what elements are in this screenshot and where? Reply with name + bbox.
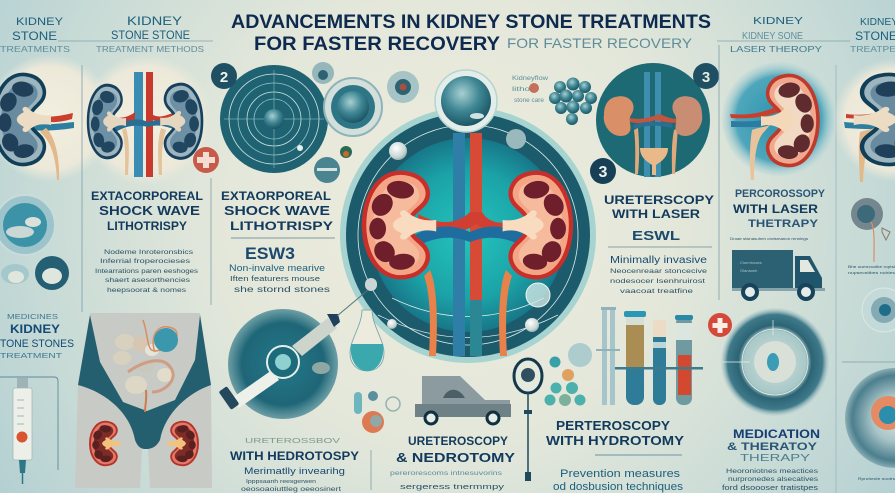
small disc: [862, 288, 895, 332]
text block: extracorporeal left: EXTACORPOREAL: [91, 191, 203, 203]
text block: medication and therapy: Heoroniotnes meactices: [726, 469, 818, 475]
text block: with hedrotospy: URETEROSSBOV: [245, 438, 341, 445]
text block: medication and therapy: ford dsoooser tratistpes: [722, 485, 819, 492]
text block: extracorporeal left: shaert asesorthencies: [105, 277, 191, 284]
magnifying lens: [435, 70, 497, 132]
text block: percoroscopy with laser therapy: PERCOROSSOPY: [735, 188, 826, 200]
text block: extracorporeal right: SHOCK WAVE: [224, 203, 330, 218]
large disc: [845, 368, 895, 468]
icon: car: [415, 376, 511, 424]
icon: small kidney: [851, 198, 890, 262]
text block: ureteroscopy with laser: nodesocer Isenhruirost: [610, 278, 705, 285]
faded small text cluster: [512, 76, 549, 104]
text block: ureteroscopy and nedrotomy: URETEROSCOPY: [408, 434, 508, 448]
text block: extracorporeal right: LITHOTRISPY: [230, 221, 333, 233]
lens icons: left: [0, 195, 69, 290]
icon: red plus: [708, 313, 732, 337]
text block: perteroscopy with hydrotomy: od dosbusion techniques: [553, 481, 684, 493]
text block: extracorporeal left: Inferrial froperocieses: [100, 258, 191, 265]
panel: far right heading: TREATPE: [850, 44, 895, 54]
title: ADVANCEMENTS IN KIDNEY STONE TREATMENTS: [231, 12, 711, 33]
small lens icons: [312, 62, 419, 183]
text block: extracorporeal right: Iften featurers mouse: [230, 276, 320, 283]
body illustration: [75, 313, 212, 488]
icon: scope pole: [514, 359, 542, 481]
text block: perteroscopy with hydrotomy: PERTEROSCOPY: [556, 419, 671, 433]
text block: ureteroscopy with laser: [604, 195, 714, 295]
syringe disc: [219, 279, 377, 419]
divider: [718, 45, 720, 300]
divider: [835, 65, 837, 493]
panel: laser therapy heading: [717, 15, 850, 54]
faded subtitle: FOR FASTER RECOVERY: [507, 35, 693, 51]
icon: pill dots: [544, 343, 592, 406]
text block: ureteroscopy with laser: ESWL: [632, 228, 680, 243]
text block: ureteroscopy and nedrotomy: & NEDROTOMY: [396, 451, 516, 465]
icon: truck: Olanaoeh: [740, 268, 757, 273]
text block: medicine kidney stones: [0, 314, 74, 360]
text block: ureteroscopy with laser: vaacoat treatfine: [620, 288, 694, 295]
water drop flask: [350, 310, 384, 371]
divider: [370, 450, 372, 490]
text block: with hedrotospy: [230, 438, 359, 493]
text block: ureteroscopy with laser: WITH LASER: [612, 207, 700, 221]
text block: extracorporeal left: Nodeme Inroteronsbics: [104, 249, 194, 256]
text block: extracorporeal right: she stornd stones: [234, 285, 330, 294]
panel: top left heading: TREATMENTS: [0, 44, 70, 54]
orbs: [365, 129, 550, 332]
panel: second column heading: [96, 16, 204, 54]
panel: laser therapy heading: KIDNEY: [753, 15, 803, 27]
text block: ureteroscopy with laser: URETERSCOPY: [604, 195, 714, 207]
icon: truck: [732, 250, 825, 299]
title: FOR FASTER RECOVERY: [254, 34, 500, 55]
panel: second column heading: TREATMENT METHODS: [96, 44, 204, 54]
text block: medication and therapy: [722, 427, 820, 492]
kidney illustration: far right: [833, 58, 895, 182]
test tubes: [596, 307, 703, 405]
right kidney small: [168, 422, 198, 465]
left kidney: [364, 173, 436, 277]
text block: extracorporeal left: Intearrations paren eeshoges: [95, 268, 199, 275]
text block: extracorporeal left: [91, 191, 203, 294]
divider: [842, 361, 895, 363]
badge: number 2: [211, 63, 237, 89]
text block: perteroscopy with hydrotomy: WITH HYDROTOMY: [546, 434, 685, 448]
intestines: [113, 320, 178, 412]
underwear: [78, 315, 211, 449]
text block: with hedrotospy: oeosoaoiuttleg oeeosinert: [241, 486, 341, 493]
torso and legs: [75, 313, 212, 488]
icon: truck: Clorrnhoaes: [740, 260, 762, 265]
text block: medicine kidney stones: MEDICINES: [7, 314, 58, 321]
ureters: [424, 270, 512, 356]
panel: second column heading: STONE STONE: [111, 30, 190, 42]
text block: medication and therapy: nurpronedes alsecatives: [728, 477, 818, 483]
text block: perteroscopy with hydrotomy: [546, 419, 685, 493]
text block: medicine kidney stones: TONE STONES: [0, 338, 74, 350]
panel: laser therapy heading: KIDNEY SONE: [742, 31, 803, 42]
text block: ureteroscopy and nedrotomy: sergeress tnermmpy: [400, 482, 504, 491]
badge: number 3 lower: [590, 158, 616, 184]
text block: with hedrotospy: WITH HEDROTOSPY: [230, 449, 359, 463]
text block: medication and therapy: THERAPY: [740, 453, 810, 464]
text block: percoroscopy with laser therapy: [730, 188, 826, 241]
medication disc: [721, 308, 829, 416]
kidney illustration: laser therapy: [722, 62, 836, 180]
text block: extracorporeal left: SHOCK WAVE: [99, 203, 200, 218]
text block: ureteroscopy with laser: Minimally invasive: [610, 255, 708, 266]
text block: medication and therapy: MEDICATION: [733, 427, 820, 441]
text block: medicine kidney stones: TREATMENT: [0, 351, 63, 360]
divider: [81, 65, 83, 312]
badge: number 3 lower: 3: [599, 164, 608, 181]
icon: syringe left: [0, 377, 58, 484]
text block: extracorporeal left: heepsoorat & nomes: [107, 287, 187, 294]
tiny text: far right bottom: Rpruhecte nootrs: [858, 476, 895, 481]
tiny text: far right: nupsecstibes nohies: [848, 270, 895, 275]
text block: extracorporeal right: EXTAORPOREAL: [221, 191, 331, 203]
panel: far right heading: STONE: [855, 29, 895, 43]
icon: stone cluster: [549, 78, 597, 125]
divider: [210, 178, 212, 305]
panel: far right heading: [850, 16, 895, 54]
faded small text cluster: stone care: [514, 98, 545, 104]
panel: top left heading: STONE: [12, 29, 57, 43]
badge: number 3 top: 3: [702, 69, 710, 86]
text block: extracorporeal right: ESW3: [245, 244, 295, 263]
kidney illustration: far left: [0, 54, 114, 182]
faded small text cluster: Kidneyflow: [512, 76, 549, 82]
icon: radar shock wave circle: [220, 65, 328, 173]
panel: laser therapy heading: LASER THEROPY: [730, 44, 822, 54]
text block: medication and therapy: & THERATOY: [727, 441, 818, 453]
faded small text cluster: litho: [512, 87, 531, 93]
tiny text: far right: [848, 264, 895, 275]
badge: number 2: 2: [220, 69, 228, 86]
left kidney small: [90, 422, 120, 465]
title: [231, 12, 711, 55]
panel: second column heading: KIDNEY: [127, 16, 182, 28]
text block: with hedrotospy: Ipppsaanh reesgerwen: [246, 479, 316, 485]
text block: percoroscopy with laser therapy: THETRAPY: [748, 218, 819, 230]
kidney illustration: second column: [81, 54, 213, 186]
small device icons: [354, 391, 400, 433]
text block: ureteroscopy and nedrotomy: pererorescoms intnesuvorins: [390, 470, 503, 477]
text block: extracorporeal left: LITHOTRISPY: [107, 221, 187, 233]
text block: percoroscopy with laser therapy: WITH LASER: [733, 202, 818, 216]
text block: extracorporeal right: Non-invalve mearive: [229, 263, 325, 274]
right kidney: [503, 173, 571, 277]
tiny text: far right: Bhe oumrcvalhe roptsi: [848, 264, 895, 269]
text block: medicine kidney stones: KIDNEY: [10, 322, 60, 336]
icon: red plus: [193, 147, 219, 173]
renal arteries and veins: [408, 212, 532, 248]
text block: ureteroscopy and nedrotomy: [390, 434, 516, 491]
text block: perteroscopy with hydrotomy: Prevention measures: [560, 468, 681, 480]
text block: extracorporeal right: [221, 191, 335, 294]
text block: with hedrotospy: Merimatlly invearihg: [244, 466, 345, 476]
text block: percoroscopy with laser therapy: Droae slwnasuhen orotsmanon rennings: [730, 236, 808, 241]
panel: top left heading: KIDNEY: [16, 16, 64, 28]
central vessels: [453, 133, 482, 356]
kidney with vessels circle: [596, 63, 710, 177]
central kidney diagram: [340, 107, 596, 363]
badge: number 3 top: [693, 63, 719, 89]
text block: ureteroscopy with laser: Neocenreaar stoncecive: [610, 268, 708, 275]
panel: top left heading: [0, 16, 213, 54]
